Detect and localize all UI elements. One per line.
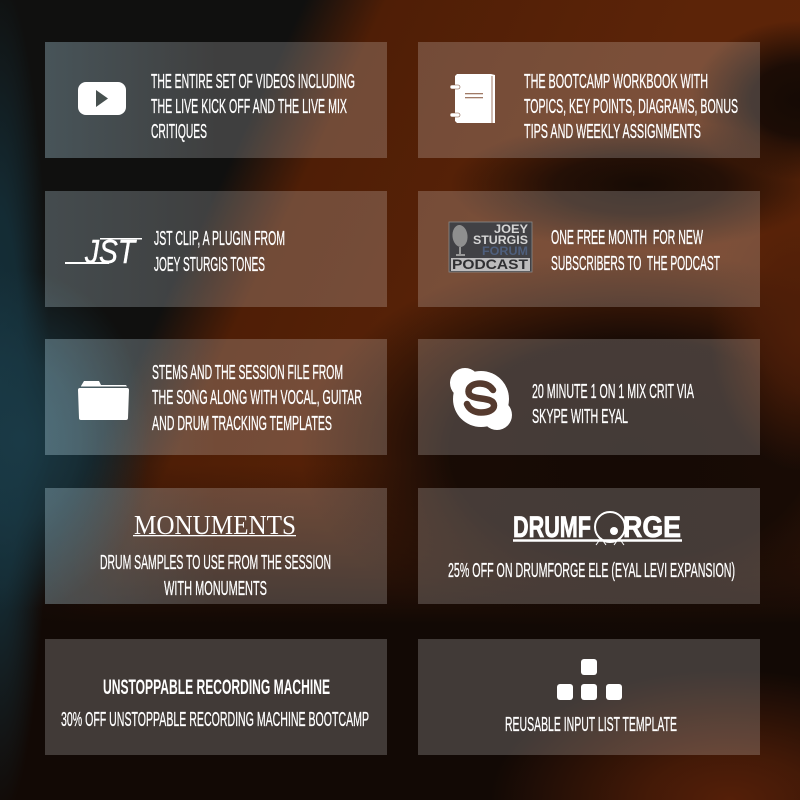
text: videos: THE LIVE KICK OFF AND THE LIVE MIX xyxy=(151,96,347,118)
panel background xyxy=(45,339,387,455)
text: JST clip xyxy=(154,228,285,276)
panel: stems xyxy=(45,339,387,455)
heading: unstoppable: UNSTOPPABLE RECORDING MACHINE xyxy=(103,676,330,699)
panel: skype xyxy=(418,339,760,455)
text: JST clip: JOEY STURGIS TONES xyxy=(154,254,265,276)
logo: Monuments: MONUMENTS xyxy=(134,510,296,540)
text: stems: STEMS AND THE SESSION FILE FROM xyxy=(152,362,343,384)
text: workbook xyxy=(524,71,738,143)
logo: Drumforge: DRUMF xyxy=(513,511,591,544)
logo: podcast: STURGIS xyxy=(473,235,528,247)
logo: JST: JST xyxy=(84,233,137,270)
panel: monuments xyxy=(45,488,387,604)
text: skype xyxy=(532,381,694,428)
text: monuments: DRUM SAMPLES TO USE FROM THE SESSION xyxy=(100,552,331,574)
icon: skype xyxy=(450,368,512,430)
text: videos xyxy=(151,71,355,143)
panel: input list xyxy=(418,639,760,755)
panel: JST clip xyxy=(45,191,387,307)
text: stems xyxy=(152,362,362,435)
icon: input blocks xyxy=(557,659,622,700)
logo: podcast: PODCAST xyxy=(452,256,528,272)
panel: drumforge xyxy=(418,488,760,604)
panel background xyxy=(45,42,387,158)
panel tint xyxy=(45,42,387,158)
text: unstoppable: 30% OFF UNSTOPPABLE RECORDING MACHINE BOOTCAMP xyxy=(61,709,369,731)
panel background xyxy=(45,488,387,604)
panel: workbook xyxy=(418,42,760,158)
panel background xyxy=(418,42,760,158)
text: JST clip: JST CLIP, A PLUGIN FROM xyxy=(154,228,285,250)
panel: podcast xyxy=(418,191,760,307)
icon: play button xyxy=(78,82,126,115)
panel background xyxy=(418,191,760,307)
panel background xyxy=(45,191,387,307)
text: videos: CRITIQUES xyxy=(151,121,207,143)
icon: folder xyxy=(78,381,129,420)
logo: Drumforge xyxy=(513,511,682,545)
logo: podcast: FORUM xyxy=(482,246,528,258)
panel background xyxy=(45,639,387,755)
text: podcast xyxy=(551,227,720,275)
logo: podcast: JOEY xyxy=(494,224,528,236)
logo: podcast xyxy=(449,222,532,272)
panel background xyxy=(418,639,760,755)
text: monuments: WITH MONUMENTS xyxy=(164,578,267,600)
logo: Drumforge: RGE xyxy=(623,511,681,544)
text: videos: THE ENTIRE SET OF VIDEOS INCLUDING xyxy=(151,71,355,93)
panel tint xyxy=(45,191,387,307)
text: skype: SKYPE WITH EYAL xyxy=(532,406,628,428)
text: monuments xyxy=(100,552,331,600)
panel background xyxy=(418,488,760,604)
panel: unstoppable xyxy=(45,639,387,755)
panel tint xyxy=(45,339,387,455)
icon: workbook xyxy=(450,74,495,123)
panel background xyxy=(418,339,760,455)
panel tint xyxy=(45,488,387,604)
panel: videos xyxy=(45,42,387,158)
text: stems: AND DRUM TRACKING TEMPLATES xyxy=(152,413,332,435)
text: stems: THE SONG ALONG WITH VOCAL, GUITAR xyxy=(152,387,362,409)
